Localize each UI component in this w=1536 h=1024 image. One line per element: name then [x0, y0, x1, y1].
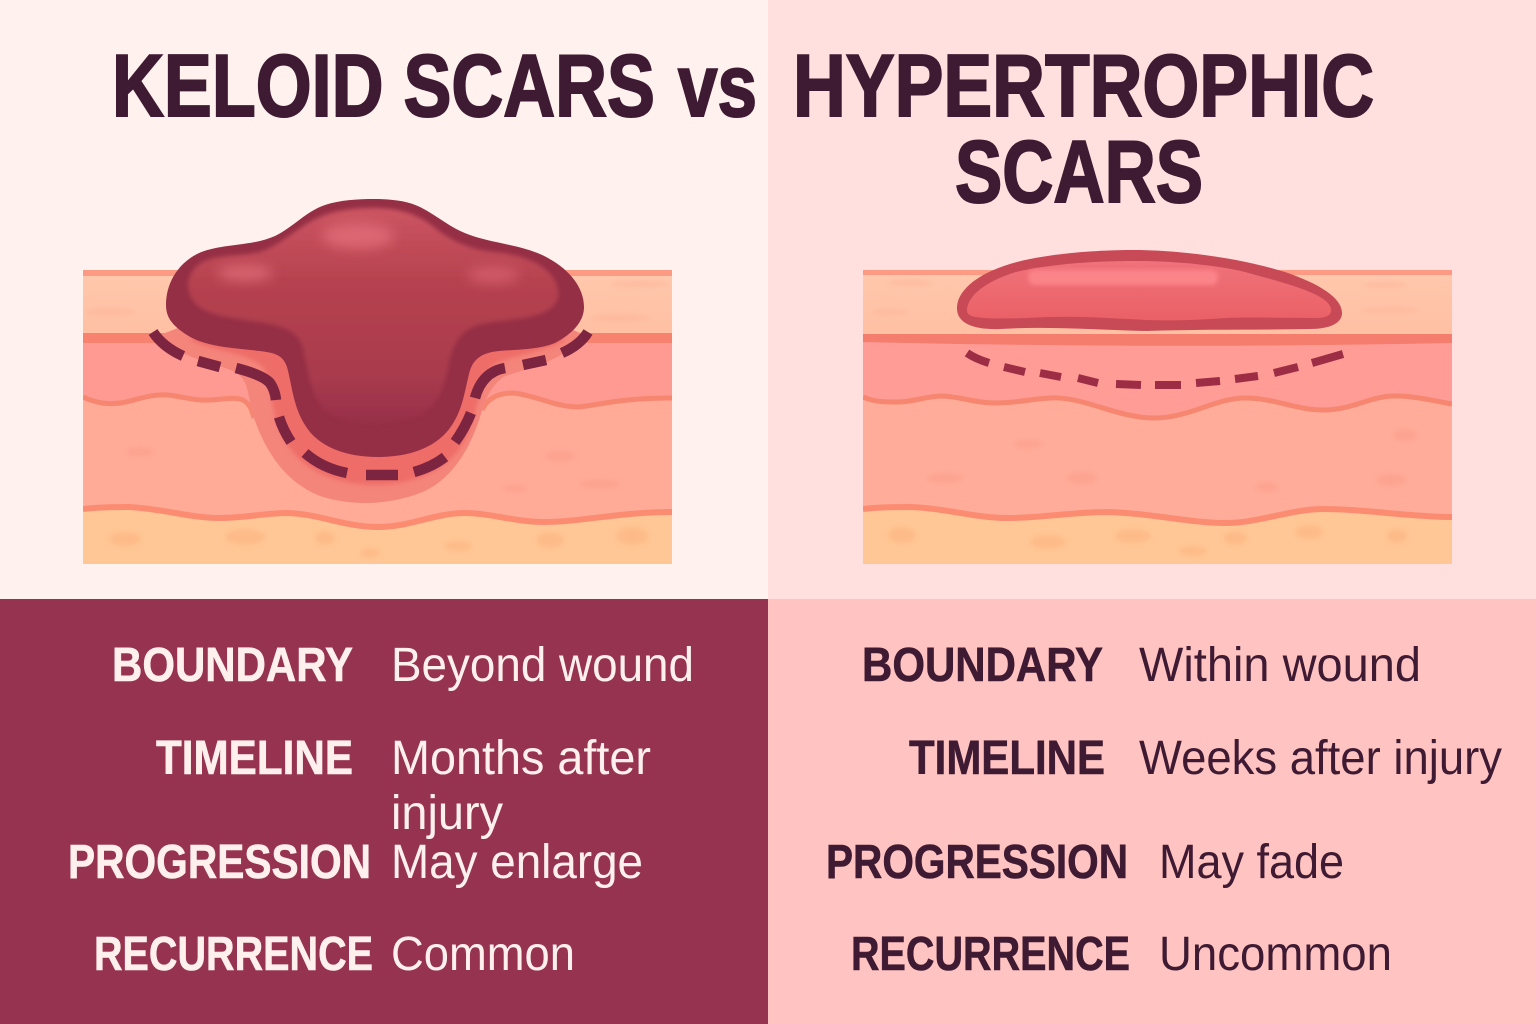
row: boundary: Beyond wound [391, 639, 694, 692]
row: recurrence: Uncommon [1159, 928, 1392, 981]
contained boundary dashed line [967, 353, 1343, 385]
row: progression [68, 836, 643, 889]
row: progression: May fade [1159, 836, 1344, 889]
title: KELOID SCARS [112, 36, 655, 135]
row: progression: PROGRESSION [826, 836, 1128, 889]
row: recurrence [851, 928, 1392, 981]
skin layers: keloid side [83, 270, 672, 564]
invasive boundary dashed line [153, 332, 588, 475]
fact table: keloid [68, 639, 694, 981]
illustration: keloid scar in skin cross-section [83, 199, 672, 564]
row: timeline: TIMELINE [156, 732, 353, 785]
row: progression: May enlarge [391, 836, 643, 889]
row: timeline: Weeks after injury [1139, 732, 1502, 785]
row: recurrence: RECURRENCE [851, 928, 1130, 981]
title: HYPERTROPHIC [793, 36, 1374, 135]
panel: hypertrophic background [768, 0, 1536, 600]
row: timeline [156, 732, 651, 840]
row: boundary: Within wound [1139, 639, 1421, 692]
title: vs [678, 36, 757, 135]
illustration: hypertrophic scar in skin cross-section [863, 250, 1452, 564]
skin layers: hypertrophic side [863, 270, 1452, 564]
row: recurrence: Common [391, 928, 575, 981]
row: progression: PROGRESSION [68, 836, 371, 889]
row: timeline: TIMELINE [909, 732, 1105, 785]
halo around keloid [160, 300, 585, 503]
title [112, 36, 1374, 221]
title: SCARS [955, 122, 1203, 221]
row: timeline: injury [391, 787, 503, 840]
row: boundary [112, 639, 694, 692]
row: boundary: BOUNDARY [862, 639, 1103, 692]
panel: keloid background [0, 0, 768, 600]
row: timeline: Months after [391, 732, 651, 785]
panel: keloid facts background [0, 599, 768, 1024]
fact table: hypertrophic [826, 639, 1502, 981]
keloid mass [166, 199, 584, 457]
row: timeline [909, 732, 1502, 785]
row: recurrence: RECURRENCE [94, 928, 373, 981]
row: boundary [862, 639, 1421, 692]
hypertrophic scar mass [957, 250, 1342, 331]
row: boundary: BOUNDARY [112, 639, 353, 692]
panel: hypertrophic facts background [768, 599, 1536, 1024]
row: progression [826, 836, 1344, 889]
